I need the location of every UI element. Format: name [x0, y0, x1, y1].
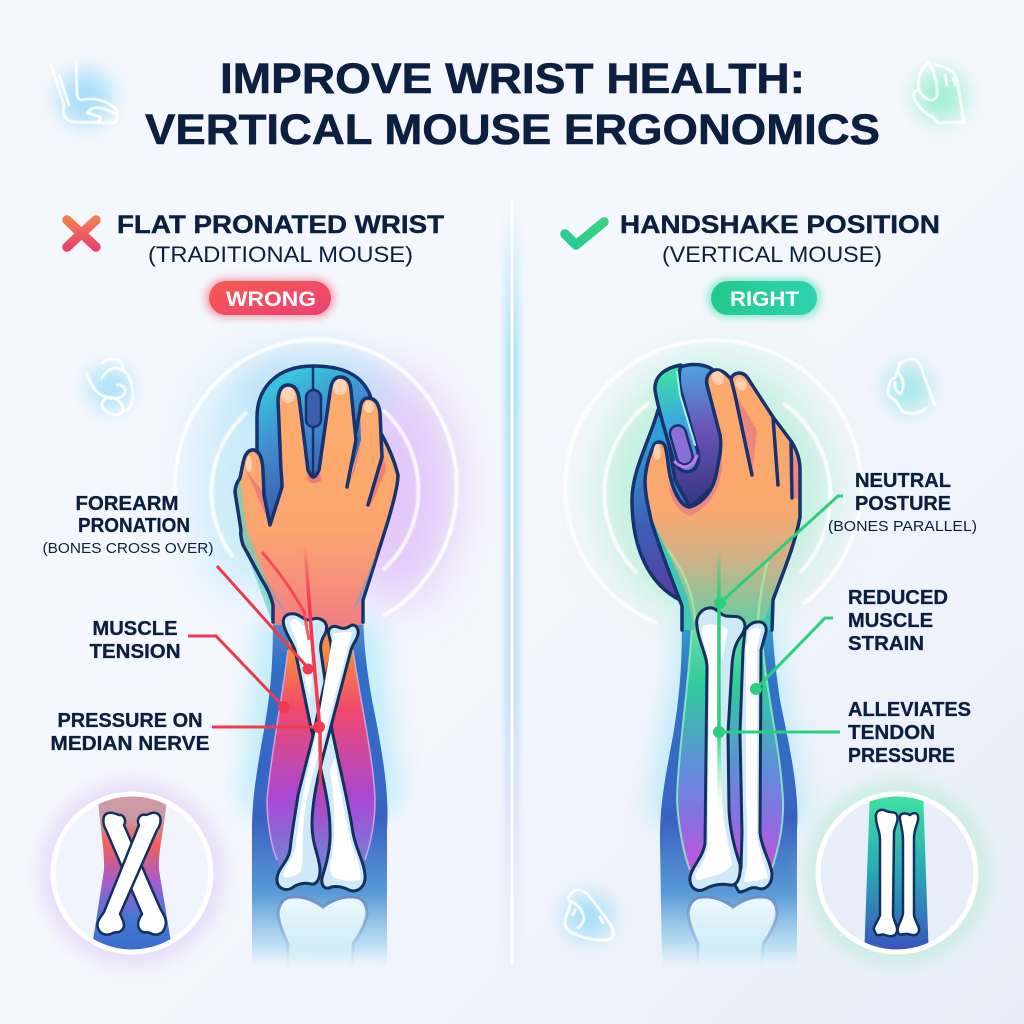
label: forearm pronation: FOREARM	[76, 493, 178, 515]
hand with vertical mouse	[632, 365, 800, 630]
mouse body	[632, 365, 730, 600]
label: muscle tension: MUSCLE	[92, 618, 178, 640]
forearm bones	[277, 614, 365, 891]
bone: radius	[735, 622, 772, 892]
forearm bones	[690, 608, 772, 892]
label: pressure on median nerve: PRESSURE ON	[58, 710, 202, 732]
icon: red cross	[67, 220, 96, 247]
label: alleviates tendon pressure: PRESSURE	[848, 745, 955, 767]
label: pressure on median nerve: MEDIAN NERVE	[50, 733, 210, 755]
badge: right	[707, 278, 821, 318]
wrist blue sides	[262, 550, 378, 620]
inset: parallel bones	[815, 790, 979, 960]
icon: right mouse hand	[886, 359, 935, 413]
heading: handshake position: HANDSHAKE POSITION	[620, 211, 940, 239]
label: muscle tension	[90, 618, 180, 663]
glow behind hand	[602, 360, 826, 820]
label: reduced muscle strain: STRAIN	[848, 633, 924, 655]
rings around hand	[175, 340, 457, 616]
label: neutral posture: (BONES PARALLEL)	[828, 519, 977, 535]
heading: flat pronated wrist: FLAT PRONATED WRIST	[117, 211, 444, 239]
label: pressure on median nerve	[50, 710, 210, 755]
inset: crossed bones	[50, 790, 214, 960]
badge: wrong: WRONG	[226, 288, 316, 311]
icon: left swirl hand	[87, 359, 133, 415]
forearm	[660, 600, 797, 967]
label: neutral posture	[828, 470, 977, 535]
badge: right: RIGHT	[730, 288, 799, 311]
label: alleviates tendon pressure: ALLEVIATES	[848, 699, 971, 721]
icon: green check	[565, 222, 604, 245]
forearm	[252, 600, 388, 967]
icon: bottom mouse	[564, 890, 614, 940]
icon: top right hand	[914, 62, 966, 123]
subheading: traditional mouse: (TRADITIONAL MOUSE)	[148, 242, 413, 267]
label: reduced muscle strain	[848, 587, 948, 655]
panel: right handshake position	[565, 211, 979, 967]
muscle highlight lines	[668, 550, 768, 620]
bone: ulna	[690, 608, 745, 890]
wrist joint	[278, 897, 367, 967]
fingernails	[246, 379, 374, 472]
label: neutral posture: NEUTRAL	[855, 470, 951, 492]
mouse body	[257, 366, 384, 530]
label: muscle tension: TENSION	[90, 641, 180, 663]
label: neutral posture: POSTURE	[855, 493, 951, 515]
subheading: vertical mouse: (VERTICAL MOUSE)	[662, 242, 882, 267]
center divider	[505, 195, 519, 970]
label: alleviates tendon pressure: TENDON	[848, 722, 935, 744]
hand	[645, 370, 800, 630]
title: IMPROVE WRIST HEALTH:	[220, 55, 805, 103]
panel: wrong flat pronated wrist	[42, 211, 457, 967]
bone: crossing behind	[283, 614, 365, 891]
title: VERTICAL MOUSE ERGONOMICS	[145, 106, 880, 154]
label: forearm pronation	[42, 493, 214, 557]
hand	[235, 377, 398, 625]
icon: top left chair and wrist	[51, 62, 117, 125]
glow behind hand	[195, 345, 457, 810]
label: reduced muscle strain: REDUCED	[848, 587, 948, 609]
rings around hand	[565, 340, 861, 623]
label: reduced muscle strain: MUSCLE	[848, 610, 933, 632]
bone: crossing front	[277, 625, 358, 890]
wrist joint	[688, 897, 777, 967]
hand with mouse	[235, 366, 398, 625]
fingernails	[654, 369, 749, 460]
label: forearm pronation: PRONATION	[78, 515, 190, 537]
red nerve lines and leaders	[188, 545, 325, 835]
label: forearm pronation: (BONES CROSS OVER)	[42, 541, 214, 557]
badge: wrong	[205, 278, 335, 318]
green tendon lines and leaders	[713, 496, 843, 810]
label: alleviates tendon pressure	[848, 699, 971, 767]
title	[145, 55, 880, 154]
